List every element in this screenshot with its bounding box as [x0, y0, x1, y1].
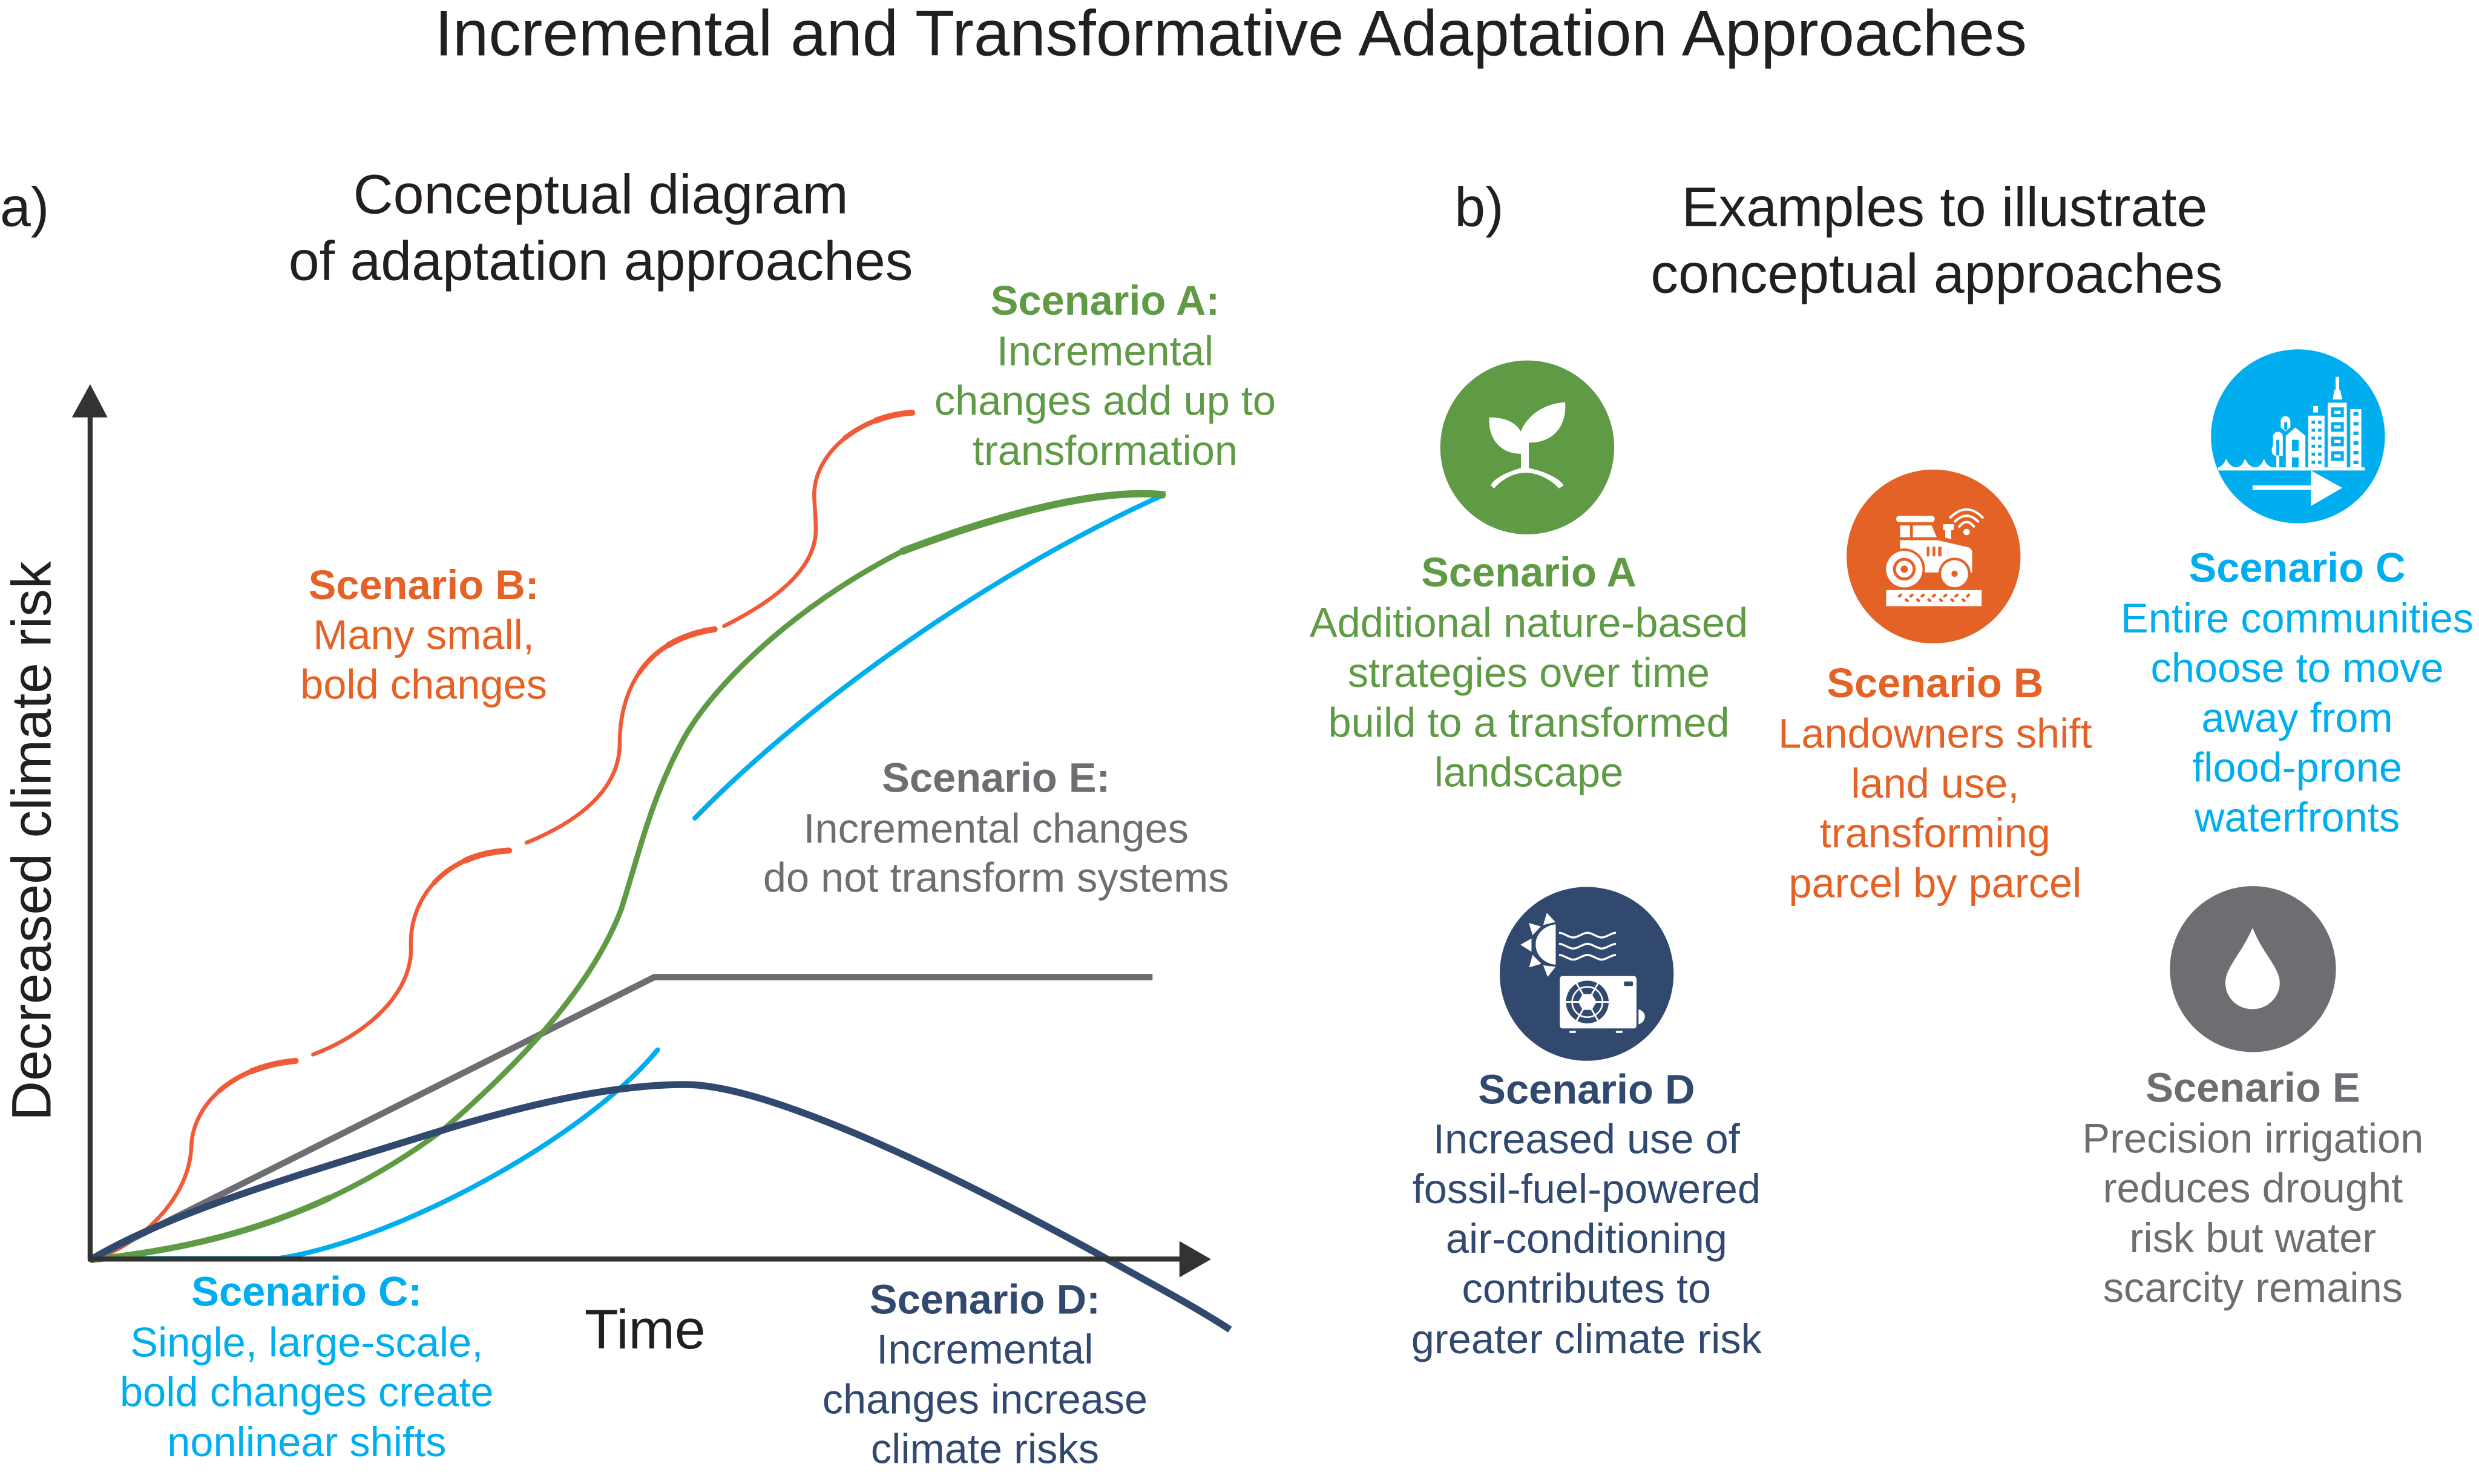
text: scenario C: flood-prone — [2192, 744, 2402, 791]
line: scenario A green curve — [90, 494, 1165, 1260]
text: scenario E: risk but water — [2130, 1215, 2376, 1261]
label: scenario A — [934, 277, 1276, 474]
panel b heading — [1650, 177, 2223, 304]
y axis label: Decreased climate risk — [1, 561, 63, 1121]
label: scenario D: climate risks — [871, 1426, 1099, 1473]
text: scenario A — [1310, 549, 1748, 796]
icon: city with arrow — [2211, 349, 2385, 524]
text: scenario C — [2121, 544, 2474, 841]
line: scenario D navy curve — [90, 1085, 1230, 1330]
text: scenario A: Additional nature-based — [1310, 600, 1748, 646]
label: scenario D: changes increase — [823, 1376, 1148, 1422]
label: scenario C — [120, 1269, 494, 1465]
label: scenario B: Many small, — [313, 611, 534, 658]
text: scenario A: strategies over time — [1348, 649, 1710, 696]
icon: smart tractor — [1847, 470, 2020, 643]
label: scenario D: Scenario D: — [870, 1276, 1100, 1323]
text: scenario B: Scenario B — [1827, 660, 2043, 706]
text: scenario E: Precision irrigation — [2082, 1115, 2423, 1161]
text: scenario C: choose to move — [2151, 645, 2444, 691]
text: scenario D: fossil-fuel-powered — [1413, 1166, 1761, 1212]
text: scenario E: Scenario E — [2146, 1065, 2360, 1111]
panel b: examples — [1310, 177, 2474, 1362]
label: scenario C: Single, large-scale, — [130, 1319, 483, 1365]
text: scenario D: Increased use of — [1433, 1116, 1741, 1163]
icon: sun and air conditioner — [1500, 887, 1673, 1061]
panel a: conceptual diagram — [0, 164, 1276, 1473]
text: scenario B: land use, — [1851, 760, 2020, 807]
label: scenario A: Incremental — [997, 327, 1213, 374]
text: scenario D: greater climate risk — [1411, 1316, 1762, 1362]
text: scenario C: Entire communities — [2121, 595, 2474, 642]
panel b heading: Examples to illustrate — [1682, 177, 2207, 238]
line: scenario B stepped curve — [90, 413, 912, 1260]
label: scenario E — [763, 755, 1229, 901]
label: scenario C: bold changes create — [120, 1369, 494, 1416]
label: scenario A: changes add up to — [934, 378, 1276, 424]
text: scenario E: scarcity remains — [2103, 1264, 2403, 1311]
text: scenario B: transforming — [1820, 810, 2051, 856]
text: scenario B — [1778, 660, 2092, 906]
icon: sprout — [1440, 361, 1614, 534]
text: scenario A: landscape — [1434, 749, 1623, 796]
text: scenario D — [1411, 1066, 1762, 1362]
text: scenario B: Landowners shift — [1778, 711, 2092, 757]
text: scenario C: waterfronts — [2194, 794, 2400, 841]
text: scenario E: reduces drought — [2103, 1165, 2403, 1212]
text: scenario A: build to a transformed — [1328, 699, 1730, 746]
label: scenario C: nonlinear shifts — [167, 1419, 446, 1465]
panel a heading: Conceptual diagram — [353, 164, 849, 226]
label: scenario D — [823, 1276, 1148, 1473]
label: scenario E: Incremental changes — [803, 805, 1189, 852]
text: scenario D: Scenario D — [1478, 1066, 1695, 1112]
text: scenario E — [2082, 1065, 2423, 1311]
panel b label: b) — [1454, 177, 1504, 238]
text: scenario D: air-conditioning — [1446, 1215, 1727, 1262]
label: scenario E: Scenario E: — [882, 755, 1110, 801]
panel a heading — [289, 164, 913, 292]
panel a label: a) — [0, 177, 49, 238]
panel b heading: conceptual approaches — [1650, 243, 2223, 304]
text: scenario B: parcel by parcel — [1788, 859, 2081, 906]
text: scenario A: Scenario A — [1421, 549, 1637, 596]
icon: water drop — [2170, 886, 2336, 1052]
label: scenario D: Incremental — [876, 1326, 1094, 1373]
label: scenario A: Scenario A: — [991, 277, 1220, 324]
text: scenario D: contributes to — [1462, 1265, 1711, 1312]
label: scenario B: bold changes — [300, 662, 547, 708]
text: scenario C: Scenario C — [2188, 544, 2406, 591]
panel a heading: of adaptation approaches — [289, 230, 913, 292]
y axis arrow — [72, 384, 108, 1260]
label: scenario C: Scenario C: — [191, 1269, 422, 1315]
label: scenario E: do not transform systems — [763, 854, 1229, 901]
x axis arrow — [88, 1241, 1211, 1278]
label: scenario B: Scenario B: — [309, 562, 539, 608]
line: scenario C two-stage curve — [90, 495, 1164, 1258]
line: scenario E plateau — [90, 977, 1152, 1260]
label: scenario B — [300, 562, 547, 708]
text: scenario C: away from — [2201, 694, 2393, 741]
x axis label: Time — [585, 1299, 706, 1361]
label: scenario A: transformation — [973, 427, 1238, 474]
